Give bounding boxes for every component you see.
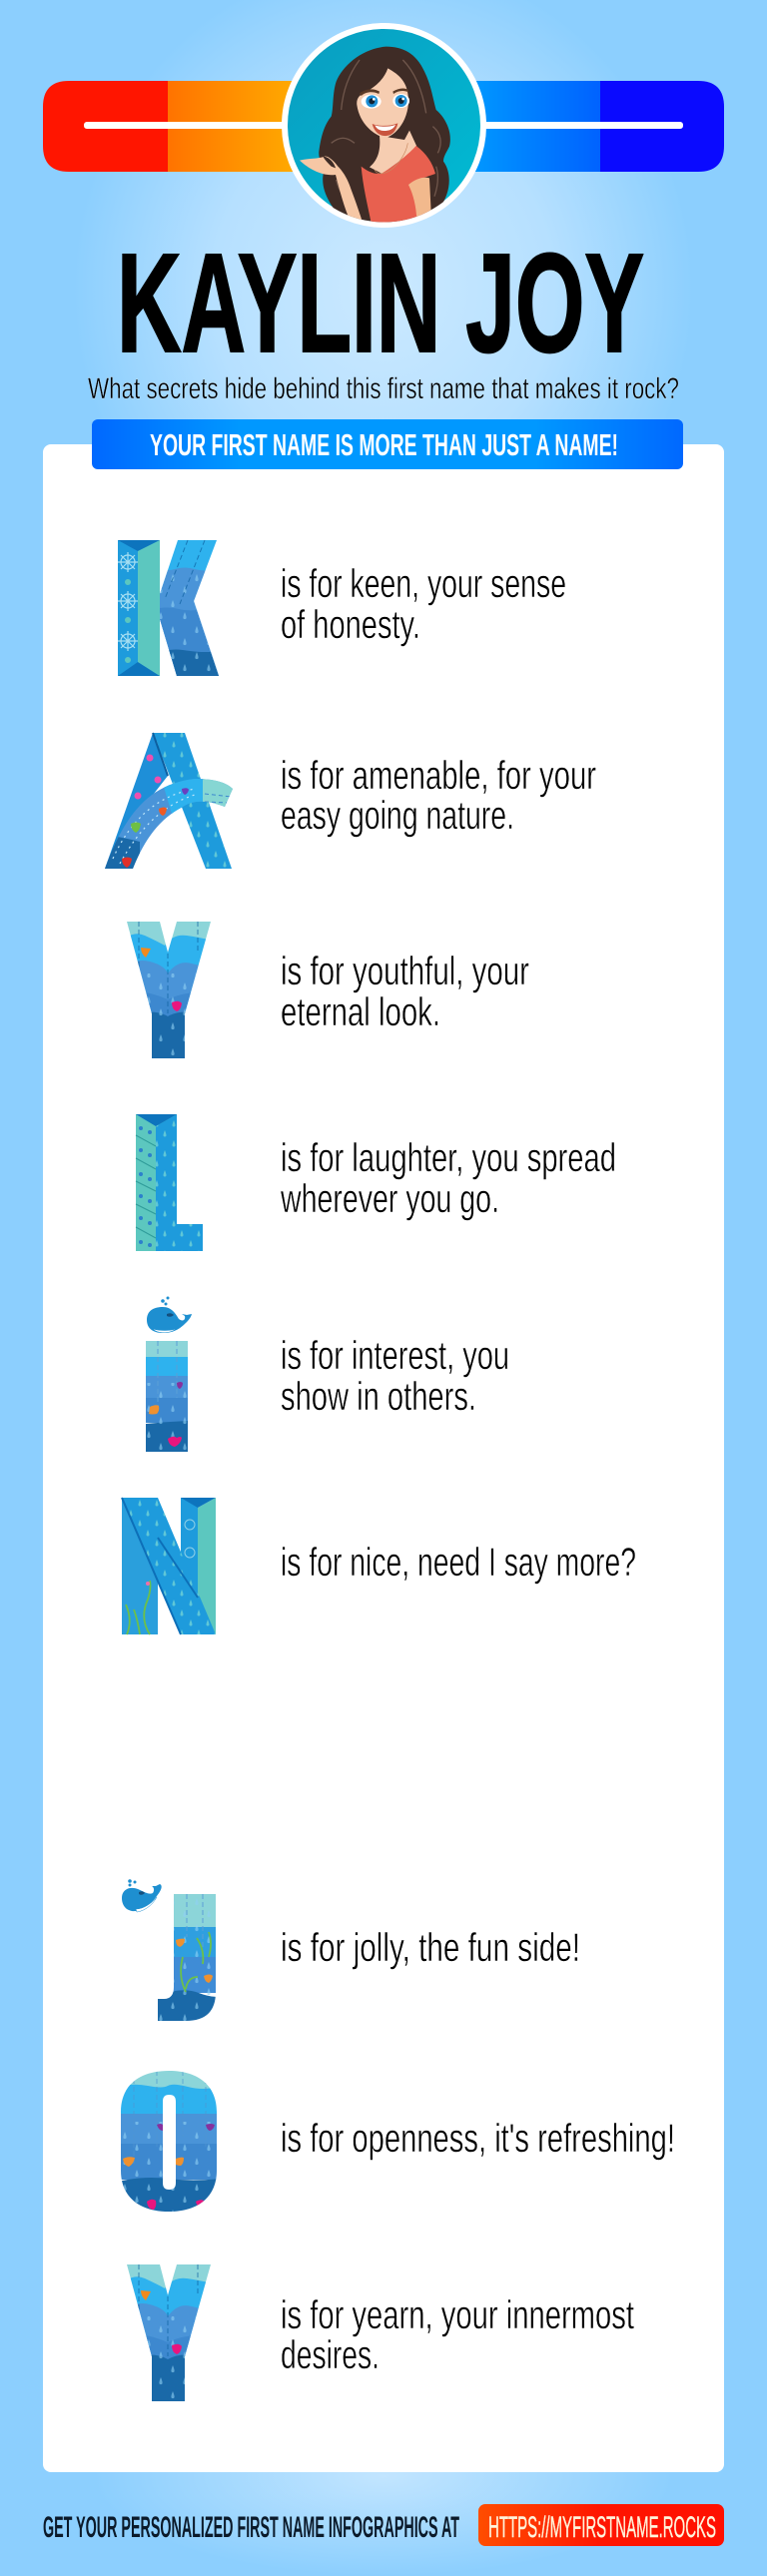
- Y description: eternal look.: [281, 990, 440, 1034]
- A description: is for amenable, for your: [281, 754, 596, 798]
- avatar portrait: [285, 26, 483, 225]
- A description: [281, 754, 596, 838]
- letter I with whale: [146, 1296, 192, 1453]
- I description: is for interest, you: [281, 1334, 509, 1378]
- letter K: [118, 540, 225, 676]
- K description: is for keen, your sense: [281, 562, 566, 606]
- letter Y (second): [127, 2264, 211, 2401]
- Y description (second): is for yearn, your innermost: [281, 2293, 634, 2337]
- banner: [92, 419, 683, 469]
- letter A: [105, 733, 233, 869]
- K description: of honesty.: [281, 603, 420, 647]
- Y description: is for youthful, your: [281, 950, 529, 993]
- Y description: [281, 950, 529, 1034]
- icon: whale: [147, 1296, 192, 1333]
- letter Y: [127, 922, 211, 1058]
- L description: [280, 1136, 616, 1221]
- L description: is for laughter, you spread: [281, 1136, 616, 1180]
- I description: show in others.: [281, 1375, 476, 1419]
- letter O: [118, 2071, 220, 2217]
- I description: [281, 1334, 509, 1419]
- K description: [281, 562, 566, 647]
- footer url button: [478, 2504, 724, 2546]
- letter N: [122, 1498, 216, 1634]
- Y description (second): desires.: [281, 2333, 380, 2377]
- header bar: [43, 81, 724, 172]
- J description: is for jolly, the fun side!: [281, 1926, 580, 1970]
- Y description (second): [281, 2293, 634, 2377]
- icon: whale: [122, 1879, 162, 1912]
- panel: white content card: [43, 444, 724, 2472]
- L description: wherever you go.: [280, 1177, 499, 1221]
- A description: easy going nature.: [281, 794, 514, 838]
- letter J with whale: [122, 1879, 220, 2027]
- letter L: [136, 1114, 203, 1251]
